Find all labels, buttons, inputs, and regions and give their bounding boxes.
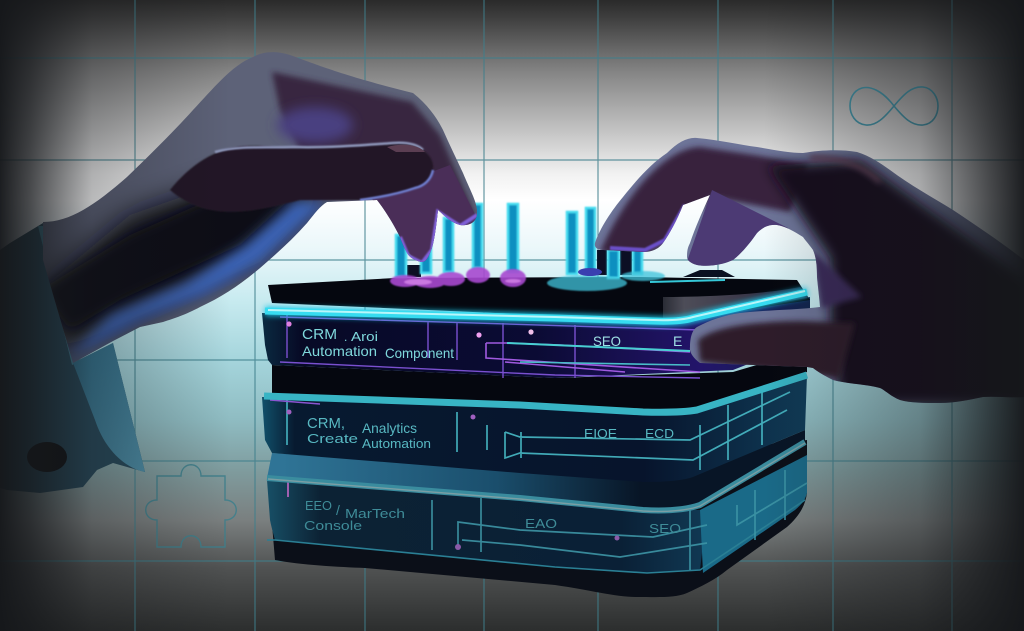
stack: top plate — [268, 270, 810, 320]
bottom tier circuit lines — [432, 470, 807, 570]
stack: bottom tier: / — [336, 502, 340, 518]
top tier circuit lines — [280, 315, 700, 378]
stack: top tier: Component — [385, 345, 454, 361]
stack: middle tier — [262, 375, 807, 482]
stack: middle tier: ECD — [645, 426, 674, 441]
icon: infinity — [850, 87, 938, 125]
stack: bottom tier: EAO — [525, 516, 557, 531]
bottom tier rim — [267, 442, 805, 511]
middle tier rim — [264, 375, 807, 412]
shirt cuff — [0, 223, 145, 493]
left vignette — [0, 0, 230, 631]
bottom tier labels: EEO — [305, 498, 332, 513]
stack: top tier — [262, 297, 810, 378]
middle tier labels: CRM, — [307, 415, 345, 432]
stack: middle tier: EIOE — [584, 426, 617, 441]
left hand — [43, 52, 478, 363]
stack: middle tier: Automation — [362, 436, 431, 451]
stack: gap between middle and bottom tiers — [267, 430, 805, 509]
stack: middle tier: Create — [307, 431, 358, 446]
stack: top tier: SEO — [593, 333, 621, 349]
right vignette — [764, 0, 1024, 631]
top tier labels: CRM — [302, 326, 337, 343]
stack: bottom tier: Console — [304, 518, 362, 533]
icon: puzzle piece — [146, 465, 236, 547]
stack: black gap under top tier — [272, 350, 807, 410]
stack: middle tier: Analytics — [362, 420, 417, 436]
top rim: glowing cyan band — [265, 291, 807, 321]
stack: top tier: E — [673, 333, 682, 349]
stack: bottom tier: SEO — [649, 521, 681, 536]
right hand — [590, 130, 1024, 410]
stack: top tier: Automation — [302, 343, 377, 359]
stack: top tier: Aroi — [351, 329, 378, 344]
middle tier circuit lines — [287, 390, 790, 470]
stack: bottom tier — [267, 440, 807, 597]
connector pins — [390, 204, 665, 291]
stack: bottom tier: MarTech — [345, 506, 405, 521]
stack: top tier: . — [344, 330, 347, 344]
